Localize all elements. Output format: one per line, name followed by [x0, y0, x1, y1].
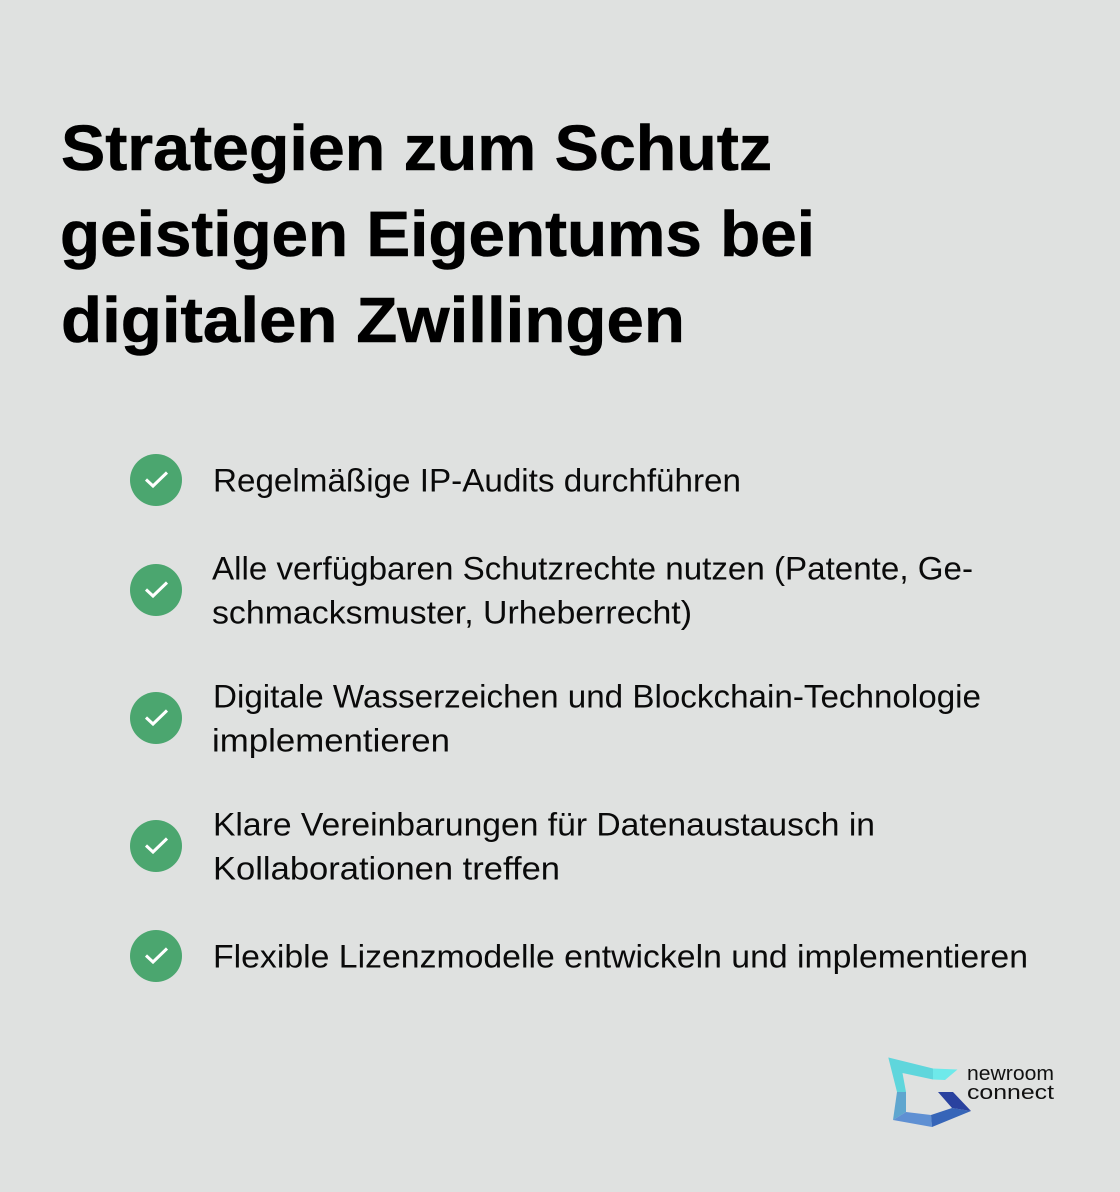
item 2: schmacksmuster, Urheberrecht) [212, 594, 692, 630]
logo: newroom connect: newroom [967, 1063, 1054, 1085]
item 3: Digitale Wasserzeichen und Blockchain-Technologie [213, 678, 981, 714]
item 5: Flexible Lizenzmodelle entwickeln und implementieren [213, 938, 1028, 974]
item 1 [130, 454, 741, 506]
item 2: Alle verfügbaren Schutzrechte nutzen (Patente, Ge- [212, 550, 973, 586]
title: geistigen Eigentums bei [60, 198, 815, 270]
item 3: implementieren [212, 722, 450, 758]
title: Strategien zum Schutz [61, 112, 772, 184]
title: digitalen Zwillingen [61, 284, 685, 356]
logo: newroom connect: connect [967, 1082, 1055, 1104]
item 1: Regelmäßige IP-Audits durchführen [213, 462, 741, 498]
item 4: Klare Vereinbarungen für Datenaustausch in [213, 806, 875, 842]
logo: newroom connect [888, 1058, 1055, 1127]
checklist [130, 454, 1028, 982]
item 5 [130, 930, 1028, 982]
item 4: Kollaborationen treffen [213, 850, 560, 886]
item 4 [130, 806, 875, 886]
item 3 [130, 678, 981, 758]
item 2 [130, 550, 973, 630]
title [60, 112, 815, 356]
